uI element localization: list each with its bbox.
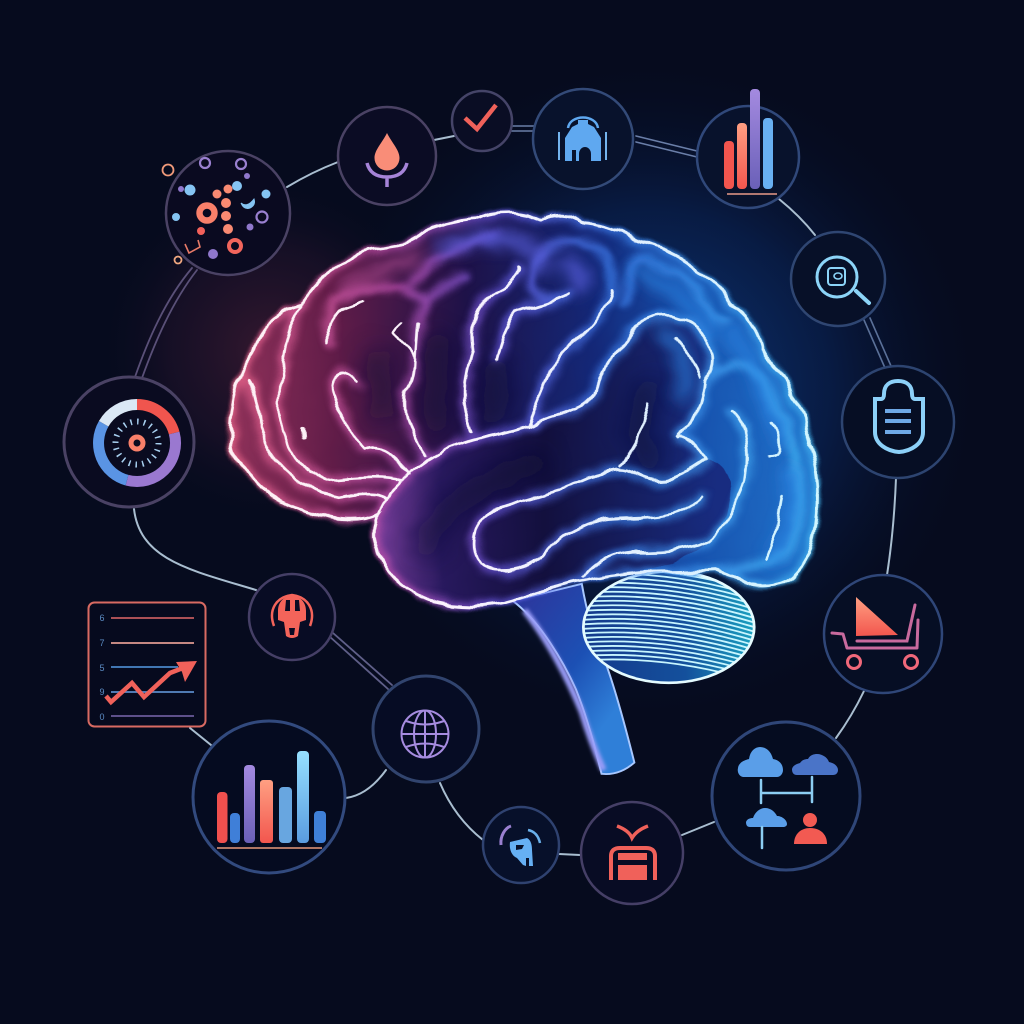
node: trend chart panel: 0 [99, 712, 105, 722]
node: television [581, 802, 683, 904]
node: shopping cart [824, 575, 942, 693]
brain stem [513, 584, 634, 774]
dark gyrus hollows [378, 343, 651, 546]
node: trend chart panel: 5 [99, 663, 105, 673]
node: tall bar chart [697, 89, 799, 208]
cerebellum [576, 569, 762, 684]
node: trend chart panel: 9 [99, 687, 105, 697]
node: trend chart panel: 7 [99, 638, 105, 648]
node: cloud network [712, 722, 860, 870]
node: padlock shield [842, 366, 954, 478]
sulci glow lines [248, 268, 781, 576]
temporal lobe [374, 317, 731, 606]
node: check mark [452, 91, 512, 151]
node: magnifier [791, 232, 885, 326]
node: trend chart panel: 6 [99, 613, 105, 623]
node: archway [533, 89, 633, 189]
node: figure with arcs [483, 807, 559, 883]
node: trend chart panel [88, 602, 206, 726]
node: particle cluster [162, 151, 290, 275]
bright blue and violet gyrus highlights [347, 237, 793, 557]
connector lines [134, 126, 896, 855]
node: gauge dial [64, 377, 194, 507]
infographic canvas [62, 88, 956, 906]
node: large bar chart [193, 721, 345, 873]
node: globe [373, 676, 479, 782]
outer halo [230, 213, 818, 606]
node: helmet [249, 574, 335, 660]
cerebrum with organic wobble [230, 213, 818, 606]
brain illustration [230, 213, 818, 774]
cerebrum base [230, 213, 818, 606]
brain outline [230, 213, 818, 606]
node: droplet [338, 107, 436, 205]
soft gyrus glow [230, 213, 818, 606]
